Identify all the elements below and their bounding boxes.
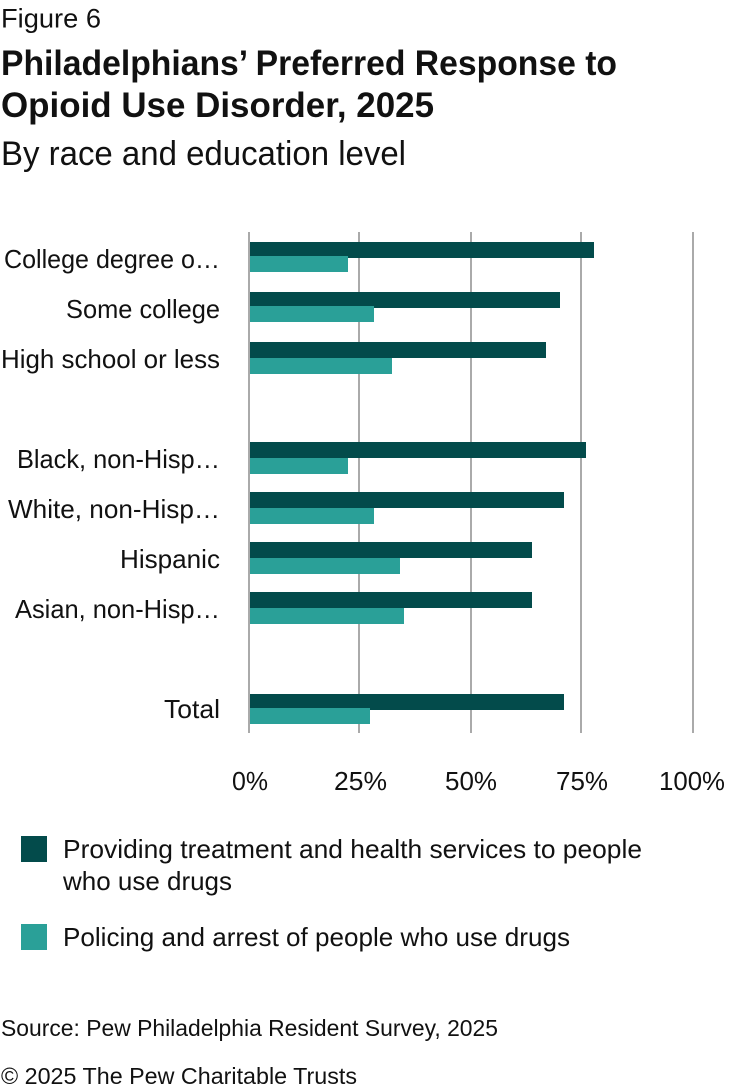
category labels: Some college [66,294,220,324]
bars: Asian, non-Hispanic [250,592,532,624]
x-axis labels: 75% [556,766,608,796]
category labels: Black, non-Hisp… [17,444,220,474]
legend [21,834,642,952]
category labels: College degree o… [4,244,220,274]
x-axis labels [232,766,725,796]
category labels: Total [164,694,220,724]
category labels: Asian, non-Hisp… [15,594,220,624]
bars: Black, non-Hispanic [250,442,586,474]
bar chart [1,232,725,796]
legend item: treatment: Providing treatment and health services to people [63,834,642,864]
bars: White, non-Hispanic [250,492,564,524]
category labels: High school or less [1,344,220,374]
x-axis labels: 100% [659,766,725,796]
title: Philadelphians’ Preferred Response to [1,44,617,83]
bars: High school or less [250,342,546,374]
category labels: Hispanic [120,544,220,574]
title: Opioid Use Disorder, 2025 [1,86,434,125]
x-axis labels: 50% [445,766,497,796]
bars: College degree or higher [250,242,594,272]
category labels [1,244,220,724]
category labels: White, non-Hisp… [8,494,220,524]
copyright: © 2025 The Pew Charitable Trusts [1,1063,357,1089]
bars: Hispanic [250,542,532,574]
legend item: treatment [21,834,642,896]
x-axis labels: 0% [232,766,268,796]
bars: Some college [250,292,560,322]
legend item: policing: Policing and arrest of people who use drugs [63,922,570,952]
figure label: Figure 6 [1,4,101,34]
source: Source: Pew Philadelphia Resident Survey, 2025 [1,1015,498,1041]
legend item: treatment: who use drugs [62,866,232,896]
x-axis labels: 25% [334,766,387,796]
subtitle: By race and education level [1,135,406,173]
title [1,44,617,125]
bars: Total [250,694,564,724]
